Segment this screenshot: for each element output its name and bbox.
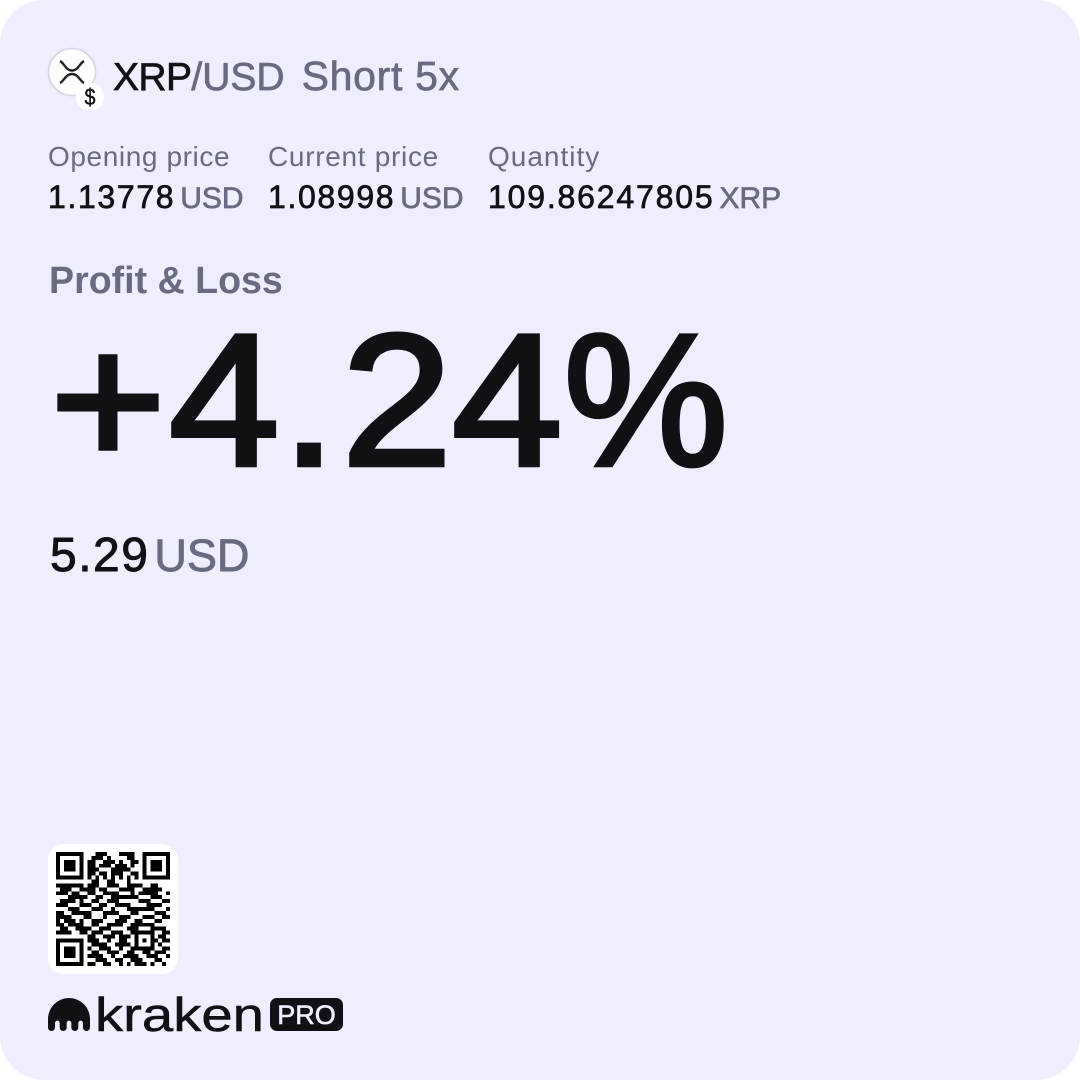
- stat: current price: [268, 141, 464, 215]
- amount: profit in USD: 5.29USD: [50, 529, 249, 582]
- heading: pair and position: XRP/USD Short 5x: [113, 53, 460, 99]
- stat: quantity: Quantity: [488, 141, 600, 172]
- QR code panel: [48, 844, 178, 974]
- heading: profit and loss: Profit & Loss: [49, 259, 283, 301]
- QR code: [56, 852, 170, 966]
- logo: Kraken Pro: [48, 990, 343, 1040]
- stat: current price: 1.08998USD: [268, 179, 464, 215]
- stat: current price: Current price: [268, 141, 439, 172]
- stat: quantity: 109.86247805XRP: [488, 179, 781, 215]
- icon: XRP coin with dollar badge: $: [84, 84, 96, 110]
- big number: percentage: %: [563, 295, 727, 505]
- big number: percentage: +4.24: [50, 295, 561, 505]
- stat: opening price: Opening price: [48, 141, 230, 172]
- icon: XRP coin with dollar badge: [48, 48, 104, 111]
- badge: PRO: PRO: [277, 1000, 336, 1030]
- icon: Kraken mark: [48, 998, 90, 1031]
- stat: opening price: [48, 141, 244, 215]
- stat: opening price: 1.13778USD: [48, 179, 244, 215]
- stat: quantity: [488, 141, 781, 215]
